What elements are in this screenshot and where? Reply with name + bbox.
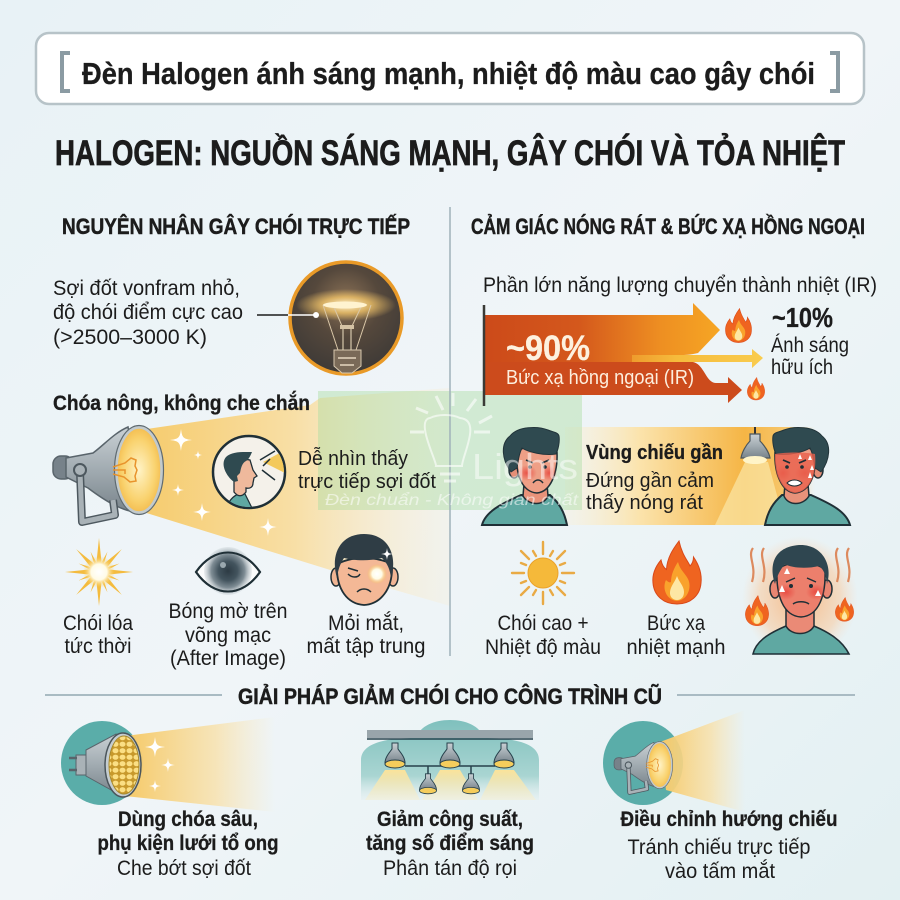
solution 3 text: Điều chỉnh hướng chiếu [620, 808, 838, 831]
solution 3 text: vào tấm mắt [665, 860, 775, 883]
label: high glare and color temperature: Chói cao + [498, 612, 588, 635]
icon: small flame [747, 377, 765, 400]
icon: sun [512, 542, 574, 604]
solution 1 text: Che bớt sợi đốt [117, 857, 251, 880]
label: after image: (After Image) [170, 647, 286, 670]
icon: tired face [331, 534, 398, 605]
label: infrared radiation: Bức xạ hồng ngoại (IR) [506, 367, 694, 389]
subheading: shallow reflector: Chóa nông, không che chắn [53, 391, 310, 415]
panel: heat and infrared [471, 214, 877, 660]
person: left, mild heat [482, 428, 567, 525]
solution 2 text: tăng số điểm sáng [366, 832, 534, 855]
label: instant glare: tức thời [64, 635, 132, 658]
solution 2 text: Giảm công suất, [377, 808, 523, 831]
section heading: causes: NGUYÊN NHÂN GÂY CHÓI TRỰC TIẾP [62, 214, 410, 239]
near zone band [565, 427, 815, 525]
light beam [140, 388, 450, 606]
near zone text: thấy nóng rát [586, 491, 703, 514]
label: after image: Bóng mờ trên [168, 600, 288, 623]
icon: filament bulb photo [257, 262, 402, 374]
watermark panel [318, 391, 582, 510]
solution 1 text: phụ kiện lưới tổ ong [98, 832, 278, 855]
solution 2: track with many lamps [361, 720, 539, 800]
sparkles in beam [170, 429, 277, 536]
solution 1 text: Dùng chóa sâu, [118, 808, 258, 831]
watermark logo and slogan: Đèn chuẩn - Không gian chất [325, 491, 579, 509]
label: strong thermal radiation: Bức xạ [647, 612, 705, 635]
filament description: độ chói điểm cực cao [53, 301, 243, 324]
value: 10 percent: ~10% [772, 302, 833, 333]
icon: floodlight [53, 426, 164, 522]
value: 90 percent: ~90% [506, 329, 590, 368]
panel: direct glare causes [53, 214, 436, 670]
label: eye strain: mất tập trung [306, 635, 426, 658]
title banner: Đèn Halogen ánh sáng mạnh, nhiệt độ màu cao gây chói [82, 56, 815, 91]
icon: big flame [653, 541, 701, 604]
label: useful light: Ánh sáng [771, 334, 849, 357]
person: right, hot and sweating [765, 428, 850, 525]
callout text: filament visible: Dễ nhìn thấy [298, 447, 408, 470]
title banner [36, 33, 864, 104]
filament description: Sợi đốt vonfram nhỏ, [53, 277, 240, 300]
label: high glare and color temperature: Nhiệt độ màu [485, 636, 601, 659]
icon: person with heat waves and flames [742, 536, 858, 660]
label: strong thermal radiation: nhiệt mạnh [626, 636, 726, 659]
label: after image: võng mạc [185, 624, 271, 647]
label: instant glare: Chói lóa [63, 612, 133, 635]
near zone text: Đứng gần cảm [586, 469, 714, 492]
callout text: filament visible: trực tiếp sợi đốt [298, 471, 436, 493]
solution 3: adjust aim direction [603, 710, 745, 812]
solutions heading: GIẢI PHÁP GIẢM CHÓI CHO CÔNG TRÌNH CŨ [238, 684, 662, 709]
icon: person looking at filament [213, 436, 287, 508]
label: eye strain: Mỏi mắt, [328, 612, 404, 635]
icon: large flame [725, 309, 752, 343]
solution 2 text: Phân tán độ rọi [383, 857, 517, 880]
solution 1: deep reflector with honeycomb [61, 717, 275, 812]
icon: eye with after image [196, 547, 260, 595]
icon: instant glare star [65, 538, 133, 606]
column divider [449, 207, 451, 656]
watermark logo and slogan: Lights [472, 446, 578, 487]
solution 3 text: Tránh chiếu trực tiếp [628, 836, 810, 859]
filament description: (>2500–3000 K) [53, 326, 207, 349]
watermark logo and slogan [325, 393, 579, 509]
panel: solutions [45, 684, 855, 883]
near zone text: Vùng chiếu gần [586, 441, 723, 464]
sankey energy chart [484, 303, 763, 406]
icon: ceiling lamp with beam [715, 427, 785, 525]
label: useful light: hữu ích [771, 356, 833, 379]
energy conversion sentence: Phần lớn năng lượng chuyển thành nhiệt (IR) [483, 274, 877, 297]
